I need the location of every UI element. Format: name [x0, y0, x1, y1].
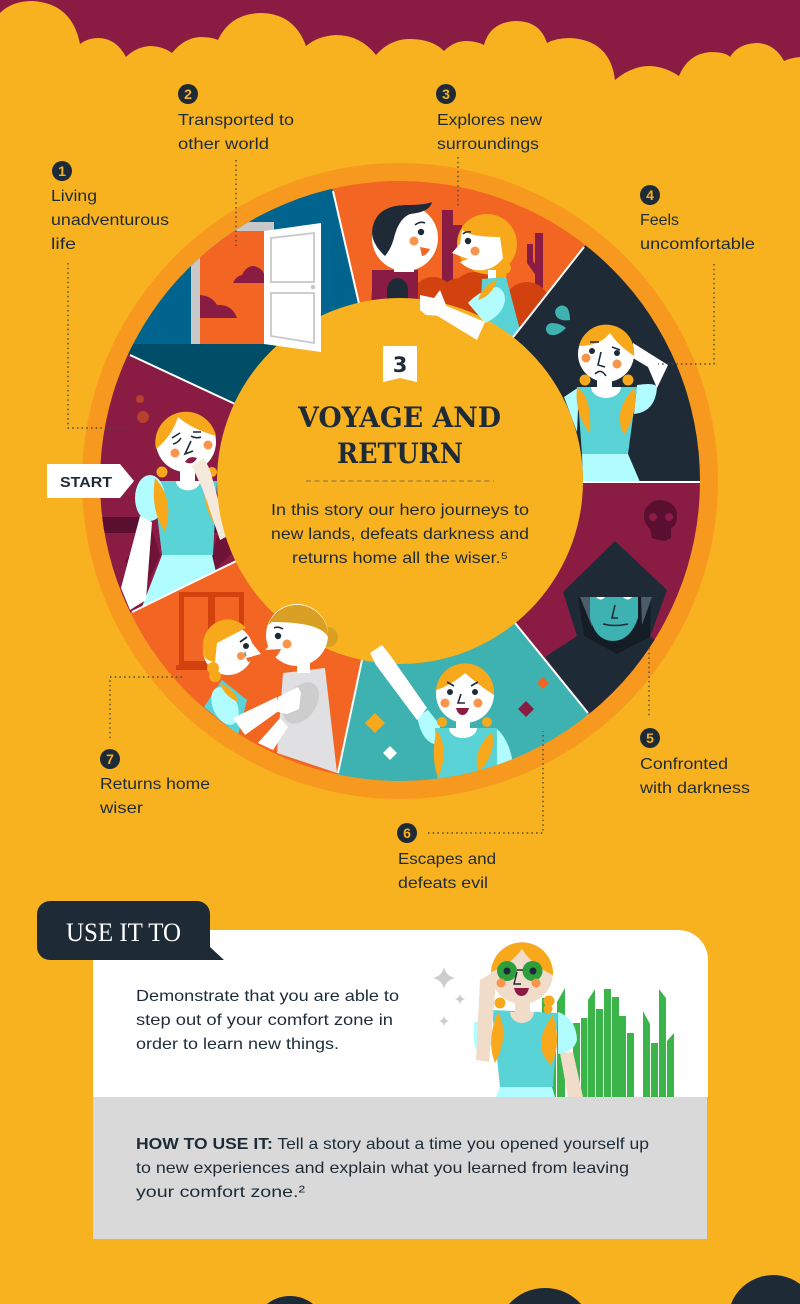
- sector 2: transported to other world: [128, 188, 358, 403]
- use it to text: order to learn new things.: [136, 1036, 339, 1053]
- step 1 label: unadventurous: [51, 212, 169, 229]
- step 7 label: 7: [106, 751, 114, 767]
- icon: open door: [264, 223, 321, 352]
- use it to text: [136, 988, 399, 1053]
- step 2 label: 2: [184, 86, 192, 102]
- step 6 label: 6: [403, 825, 411, 841]
- panel: how to use it: [93, 1097, 707, 1239]
- step 1 label: 1: [58, 163, 66, 179]
- step 4 label: [640, 185, 755, 364]
- step 6 label: defeats evil: [398, 875, 488, 892]
- step 4 label: 4: [646, 187, 654, 203]
- start tag: [47, 464, 134, 498]
- sector 7: returns home wiser: [130, 562, 361, 774]
- use it to text: step out of your comfort zone in: [136, 1012, 393, 1029]
- woman's head over the center circle: [265, 604, 338, 666]
- step 4 label: uncomfortable: [640, 236, 755, 253]
- icon: green city: [542, 988, 674, 1097]
- step 1 label: life: [51, 236, 76, 253]
- panel: how to use it: your comfort zone.²: [136, 1184, 306, 1201]
- icon: sparkles: [433, 967, 465, 1026]
- spokes: [130, 191, 700, 773]
- center description: In this story our hero journeys to: [271, 502, 529, 519]
- center badge: 3: [383, 346, 417, 382]
- outer ring: [82, 163, 718, 799]
- step 3 label: [436, 84, 542, 207]
- step 3 label: surroundings: [437, 136, 539, 153]
- step 2 label: [178, 84, 294, 246]
- use it to tab: USE IT TO: [66, 918, 181, 947]
- step 1 label: [51, 161, 169, 428]
- scalloped cloud header: [0, 0, 800, 80]
- use it to tab: [37, 901, 224, 960]
- raised arm over the center circle: [370, 645, 427, 720]
- story wheel: [90, 170, 710, 790]
- sector 3: explores new surroundings: [332, 181, 586, 336]
- center description: new lands, defeats darkness and: [271, 526, 529, 543]
- illustration: girl with green glasses: [474, 942, 583, 1097]
- center description: returns home all the wiser.⁵: [292, 550, 508, 567]
- title: VOYAGE AND: [297, 401, 501, 434]
- step 3 label: Explores new: [437, 112, 542, 129]
- step 6 label: Escapes and: [398, 851, 496, 868]
- center badge: 3: 3: [393, 353, 407, 377]
- step 7 label: Returns home: [100, 776, 210, 793]
- step 5 label: Confronted: [640, 756, 728, 773]
- step 4 label: Feels: [640, 212, 679, 229]
- title: RETURN: [337, 437, 463, 470]
- sector 4: feels uncomfortable: [514, 245, 700, 481]
- step 2 label: other world: [178, 136, 269, 153]
- step 1 label: Living: [51, 188, 97, 205]
- step 7 label: wiser: [99, 800, 144, 817]
- step 7 label: [99, 677, 210, 817]
- step 5 label: with darkness: [639, 780, 750, 797]
- step 5 label: 5: [646, 730, 654, 746]
- panel: how to use it: HOW TO USE IT: Tell a story about a time you opened yourself up: [136, 1136, 649, 1153]
- reaching hand and arm: [420, 280, 505, 340]
- step 3 label: 3: [442, 86, 450, 102]
- title: [297, 401, 501, 470]
- sector 1: unadventurous life: [100, 354, 236, 613]
- panel: use it to: [93, 930, 708, 1097]
- step 2 label: Transported to: [178, 112, 294, 129]
- next section circles: [267, 1275, 800, 1304]
- panel: how to use it: to new experiences and explain what you learned from leaving: [136, 1160, 629, 1177]
- step 5 label: [639, 648, 750, 797]
- sector 5: confronted with darkness: [516, 483, 700, 714]
- use it to text: Demonstrate that you are able to: [136, 988, 399, 1005]
- center circle: [217, 298, 583, 664]
- start tag: START: [60, 474, 112, 491]
- center description: [271, 502, 529, 567]
- step 6 label: [397, 731, 543, 892]
- sector 6: escapes and defeats evil: [338, 624, 589, 781]
